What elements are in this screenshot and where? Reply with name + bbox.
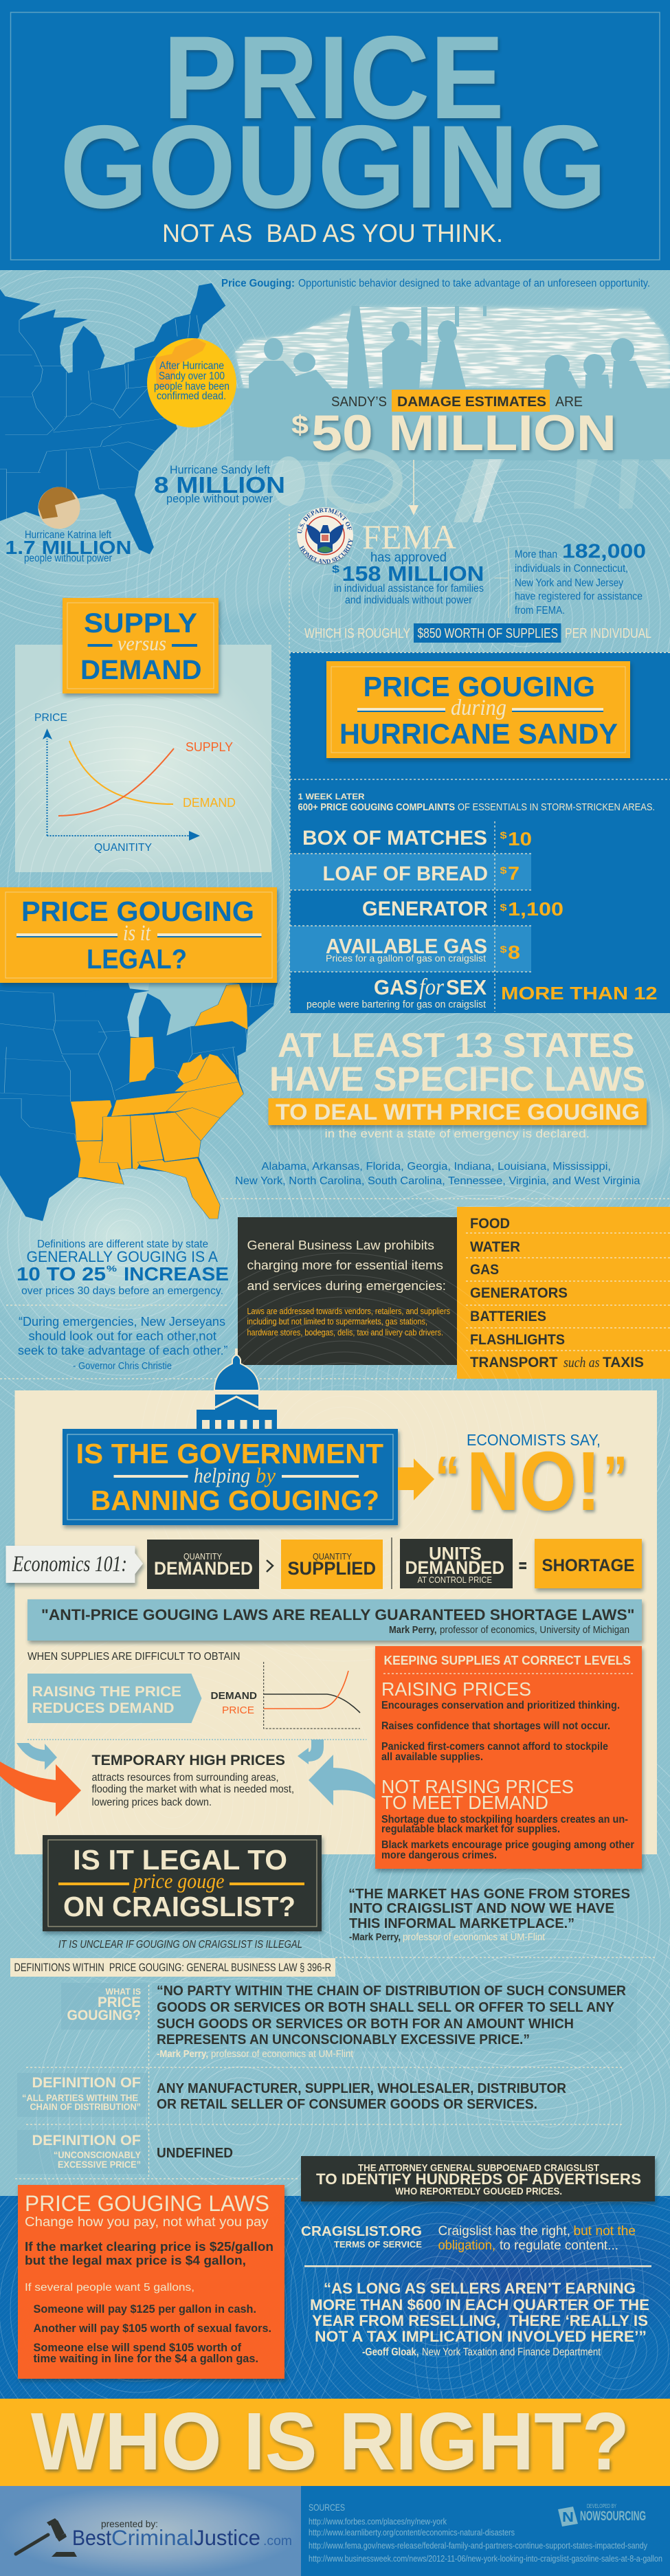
panel: essential items list: BATTERIES <box>470 1309 546 1324</box>
developer logo: N <box>562 2510 574 2525</box>
panel: price gouging laws: Someone else will spend $105 worth of <box>33 2342 241 2354</box>
presenter logo: .com <box>263 2534 292 2549</box>
row: unconscionably excessive price: EXCESSIVE PRICE” <box>58 2159 141 2170</box>
sources list: SOURCES <box>309 2502 345 2513</box>
table of gouged prices: LOAF OF BREAD <box>323 863 488 885</box>
equation: demanded over supplied equals shortage: QUANTITY <box>183 1552 223 1562</box>
Craigslist terms of service: to regulate content... <box>500 2239 618 2253</box>
banner: attorney general subpoena: TO IDENTIFY HUNDREDS OF ADVERTISERS <box>316 2170 641 2188</box>
equation: demanded over supplied equals shortage <box>147 1537 642 1589</box>
panel: price gouging during Hurricane Sandy <box>290 652 670 1013</box>
note: unclear if illegal: IT IS UNCLEAR IF GOUGING ON CRAIGSLIST IS ILLEGAL <box>58 1939 302 1951</box>
quote: market gone to Craigslist: “THE MARKET HAS GONE FROM STORES <box>348 1887 630 1902</box>
quote band: guaranteed shortage laws: professor of economics, University of Michigan <box>440 1624 629 1636</box>
text: temporary high prices <box>92 1753 294 1808</box>
stat: 182,000 individuals registered <box>515 540 646 617</box>
banner: is price gouging legal: LEGAL? <box>87 944 187 975</box>
table of gouged prices: 8 <box>508 942 520 963</box>
tag: raising the price reduces demand: REDUCES DEMAND <box>32 1700 174 1716</box>
banner: is price gouging legal: PRICE GOUGING <box>21 896 254 927</box>
heading banner: HURRICANE SANDY <box>339 718 618 750</box>
chart: demand and price: PRICE <box>222 1705 254 1716</box>
stat: 10 to 25 percent increase <box>16 1239 229 1297</box>
text: temporary high prices: attracts resources from surrounding areas, <box>92 1772 279 1784</box>
panel: keeping supplies at correct levels: more dangerous crimes. <box>381 1850 497 1861</box>
row: what is price gouging: REPRESENTS AN UNCONSCIONABLY EXCESSIVE PRICE.” <box>157 2032 530 2047</box>
stat: 182,000 individuals registered: New York and New Jersey <box>515 577 623 589</box>
row: what is price gouging: professor of economics at UM-Flint <box>211 2049 353 2060</box>
equation: demanded over supplied equals shortage: DEMANDED <box>154 1558 253 1579</box>
banner: is it legal on craigslist: price gouge <box>132 1869 225 1893</box>
table of gouged prices: SEX <box>446 975 487 999</box>
banner: is it legal on craigslist: IS IT LEGAL TO <box>73 1844 287 1876</box>
row: what is price gouging: PRICE <box>98 1995 141 2010</box>
quote band: guaranteed shortage laws: Mark Perry, <box>389 1624 437 1636</box>
panel: keeping supplies at correct levels: Raises confidence that shortages will not occur. <box>381 1720 610 1732</box>
arrow: blue small from top right <box>298 1740 324 1764</box>
panel: keeping supplies at correct levels: regulatable black market for supplies. <box>381 1823 560 1835</box>
panel: keeping supplies at correct levels: KEEPING SUPPLIES AT CORRECT LEVELS <box>383 1653 631 1667</box>
complaints note: 1 WEEK LATER <box>298 792 365 801</box>
panel: keeping supplies at correct levels: Encourages conservation and prioritized thinking. <box>381 1700 620 1711</box>
FEMA approvals: has approved <box>370 551 447 565</box>
quote: Geoff Gloak: YEAR FROM RESELLING, THERE ‘REALLY IS <box>312 2312 648 2329</box>
circle: Katrina area <box>38 487 80 529</box>
panel: essential items list: GENERATORS <box>470 1285 568 1301</box>
panel: General Business Law: including but not limited to supermarkets, gas stations, <box>247 1316 427 1326</box>
tag: raising the price reduces demand: RAISING THE PRICE <box>32 1684 181 1700</box>
per individual supplies strip: $850 WORTH OF SUPPLIES <box>418 626 558 641</box>
heading: at least 13 states: TO DEAL WITH PRICE GOUGING <box>276 1100 640 1124</box>
stat: 182,000 individuals registered: from FEMA. <box>515 605 565 617</box>
footer <box>0 2486 670 2576</box>
row: unconscionably excessive price: DEFINITION OF <box>32 2133 141 2148</box>
icon: Homeland Security seal: U.S. DEPARTMENT OF <box>298 507 352 533</box>
text: temporary high prices: flooding the market with what is needed most, <box>92 1784 294 1795</box>
quote: Governor Chris Christie <box>18 1315 228 1372</box>
quote: market gone to Craigslist: INTO CRAIGSLIST AND NOW WE HAVE <box>349 1901 614 1916</box>
quote: Governor Chris Christie: - Governor Chris Christie <box>73 1360 172 1372</box>
stat: 10 to 25 percent increase: Definitions are different state by state <box>37 1239 208 1250</box>
developer logo <box>558 2503 646 2527</box>
banner: attorney general subpoena: WHO REPORTEDLY GOUGED PRICES. <box>395 2186 562 2197</box>
panel: essential items list: GAS <box>470 1262 499 1278</box>
row: what is price gouging: -Mark Perry, <box>157 2049 208 2060</box>
panel: title header <box>0 0 670 270</box>
complaints note: 600+ PRICE GOUGING COMPLAINTS <box>298 802 455 813</box>
stat: 182,000 individuals registered: More than <box>515 548 557 561</box>
sources list: http://www.learnliberty.org/content/economics-natural-disasters <box>309 2527 515 2538</box>
title <box>60 12 607 233</box>
chart: supply versus demand <box>0 645 328 1091</box>
row: what is price gouging: GOODS OR SERVICES OR BOTH SHALL SELL OR OFFER TO SELL ANY <box>157 2000 615 2015</box>
circle: Sandy deaths: confirmed dead. <box>157 390 226 402</box>
stat: Katrina 1.7 million <box>5 529 132 564</box>
table of gouged prices: $ <box>500 902 507 913</box>
panel: keeping supplies at correct levels: Black markets encourage price gouging among other <box>381 1839 634 1851</box>
table of gouged prices: MORE THAN 12 <box>501 983 657 1003</box>
tag: raising the price reduces demand <box>27 1674 202 1723</box>
damage estimates headline: ARE <box>555 395 583 410</box>
row: what is price gouging: WHAT IS <box>106 1986 141 1997</box>
stat: Sandy 8 million: Hurricane Sandy left <box>170 463 270 476</box>
arrow: blue from orange panel <box>309 1755 375 1806</box>
stat: 10 to 25 percent increase: over prices 30 days before an emergency. <box>21 1285 223 1297</box>
arrow: orange into temporary prices <box>0 1762 81 1817</box>
FEMA approvals: and individuals without power <box>345 595 473 606</box>
table of gouged prices <box>290 821 657 1012</box>
quote: Geoff Gloak: “AS LONG AS SELLERS AREN’T EARNING <box>324 2280 636 2297</box>
panel: essential items list: WATER <box>470 1239 520 1255</box>
panel: price gouging laws: If several people want 5 gallons, <box>25 2282 194 2294</box>
chart: demand and price <box>210 1662 360 1729</box>
damage estimates headline: DAMAGE ESTIMATES <box>397 395 546 410</box>
stat: Sandy 8 million: people without power <box>166 492 273 505</box>
row: unconscionably excessive price <box>32 2133 233 2170</box>
table of gouged prices: 1,100 <box>508 898 563 920</box>
FEMA approvals: FEMA <box>362 518 456 556</box>
quote: market gone to Craigslist: -Mark Perry, <box>349 1932 401 1943</box>
complaints note <box>298 792 655 813</box>
stat: Sandy 8 million <box>154 463 285 505</box>
quantity label: QUANITITY <box>94 842 152 854</box>
quote: Geoff Gloak: -Geoff Gloak, <box>362 2346 419 2358</box>
Craigslist terms of service: obligation, <box>438 2239 495 2253</box>
FEMA approvals <box>332 518 509 618</box>
equation: demanded over supplied equals shortage: QUANTITY <box>313 1552 353 1562</box>
stat: 182,000 individuals registered: 182,000 <box>562 540 646 562</box>
table of gouged prices: Prices for a gallon of gas on craigslist <box>326 953 486 964</box>
demand label: DEMAND <box>183 796 236 810</box>
row: all parties: “ALL PARTIES WITHIN THE <box>22 2092 138 2103</box>
circle: Sandy deaths: Sandy over 100 <box>159 370 225 382</box>
banner: is price gouging legal <box>0 887 277 983</box>
title: GOUGING <box>60 101 607 233</box>
damage estimates headline: SANDY’S <box>331 395 387 410</box>
panel: keeping supplies at correct levels: RAISING PRICES <box>381 1678 531 1700</box>
heading: at least 13 states: in the event a state of emergency is declared. <box>324 1128 590 1140</box>
icon: Homeland Security seal: HOMELAND SECURITY <box>300 538 353 564</box>
damage estimates headline <box>291 390 616 461</box>
Craigslist terms of service: Craigslist has the right, <box>438 2224 570 2239</box>
economists say no: NO! <box>467 1434 601 1528</box>
panel: General Business Law: Laws are addressed towards vendors, retailers, and suppliers <box>247 1306 450 1316</box>
circle: Sandy deaths: After Hurricane <box>159 360 224 372</box>
panel: price gouging laws: but the legal max price is $4 gallon, <box>25 2253 246 2267</box>
presenter logo: Best <box>72 2525 111 2550</box>
title: PRICE <box>163 12 504 144</box>
table of gouged prices: $ <box>500 865 507 876</box>
list of states: Alabama, Arkansas, Florida, Georgia, Indiana, Louisiana, Mississippi, <box>261 1161 611 1173</box>
quote band: guaranteed shortage laws: "ANTI-PRICE GOUGING LAWS ARE REALLY GUARANTEED SHORTAGE LAWS" <box>41 1606 635 1623</box>
heading banner: during <box>451 696 506 720</box>
quote: market gone to Craigslist <box>348 1887 630 1943</box>
table: definitions <box>15 1983 637 2179</box>
panel: keeping supplies at correct levels <box>375 1646 642 1869</box>
definition line: Price Gouging: <box>221 278 295 289</box>
price label: PRICE <box>34 712 67 724</box>
row: what is price gouging: SUCH GOODS OR SERVICES OR BOTH FOR AN AMOUNT WHICH <box>157 2017 574 2032</box>
panel: essential items list <box>457 1207 670 1379</box>
row: all parties: OR RETAIL SELLER OF CONSUMER GOODS OR SERVICES. <box>157 2097 537 2112</box>
quote band: guaranteed shortage laws <box>27 1599 642 1641</box>
equation: demanded over supplied equals shortage: AT CONTROL PRICE <box>418 1575 492 1585</box>
banner: supply versus demand: DEMAND <box>80 655 202 685</box>
panel: General Business Law: General Business Law prohibits <box>247 1239 434 1252</box>
panel: General Business Law: hardware stores, bodegas, delis, taxi and livery cab drivers. <box>247 1327 443 1337</box>
table of gouged prices: for <box>419 975 445 1000</box>
sources list: http://www.forbes.com/places/ny/new-york <box>309 2516 447 2527</box>
FEMA approvals: $ <box>332 564 340 575</box>
presenter logo: presented by: <box>101 2519 158 2529</box>
banner: attorney general subpoena <box>301 2156 655 2201</box>
quote: Governor Chris Christie: “During emergencies, New Jerseyans <box>19 1315 225 1329</box>
heading: at least 13 states: AT LEAST 13 STATES <box>278 1026 635 1065</box>
quote: Geoff Gloak: MORE THAN $600 IN EACH QUARTER OF THE <box>310 2296 649 2313</box>
panel: General Business Law <box>238 1217 457 1365</box>
table of gouged prices: 10 <box>508 828 532 850</box>
Craigslist terms of service: but not the <box>573 2224 636 2239</box>
per individual supplies strip: WHICH IS ROUGHLY <box>304 626 410 641</box>
heading banner: PRICE GOUGING <box>363 671 595 702</box>
table of gouged prices: GENERATOR <box>362 898 488 920</box>
banner: is price gouging legal: is it <box>123 921 151 946</box>
banner: attorney general subpoena: THE ATTORNEY GENERAL SUBPOENAED CRAIGSLIST <box>358 2163 599 2174</box>
panel: price gouging laws: PRICE GOUGING LAWS <box>25 2191 269 2216</box>
table of gouged prices: GAS <box>374 975 418 999</box>
sources list <box>309 2502 662 2564</box>
supply label: SUPPLY <box>186 740 233 754</box>
circle: Sandy deaths <box>147 338 236 428</box>
tag: Economics 101: Economics 101: <box>12 1552 127 1577</box>
row: all parties: CHAIN OF DISTRIBUTION” <box>30 2101 141 2112</box>
row: what is price gouging <box>67 1984 627 2060</box>
stat: 10 to 25 percent increase: 10 TO 25 <box>16 1263 106 1285</box>
equation: demanded over supplied equals shortage: DEMANDED <box>405 1557 504 1578</box>
stat: Sandy 8 million: 8 MILLION <box>154 472 285 498</box>
banner: is the government helping: IS THE GOVERNMENT <box>76 1438 383 1469</box>
panel: blue lower section <box>0 2196 670 2399</box>
stat: Katrina 1.7 million: 1.7 MILLION <box>5 537 132 558</box>
banner: is it legal on craigslist: ON CRAIGSLIST? <box>63 1891 295 1922</box>
developer logo: DEVELOPED BY <box>587 2503 616 2509</box>
row: unconscionably excessive price: “UNCONSCIONABLY <box>54 2149 142 2160</box>
list of states: New York, North Carolina, South Carolina, Tennessee, Virginia, and West Virginia <box>235 1175 640 1187</box>
banner: is the government helping <box>63 1429 398 1525</box>
photo: flood survivors silhouettes <box>234 306 670 522</box>
Craigslist terms of service: TERMS OF SERVICE <box>334 2239 422 2250</box>
panel: keeping supplies at correct levels: Panicked first-comers cannot afford to stockpile <box>381 1741 608 1753</box>
chart: demand and price: DEMAND <box>210 1690 257 1702</box>
table of gouged prices: BOX OF MATCHES <box>302 827 487 850</box>
row: what is price gouging: GOUGING? <box>67 2008 141 2023</box>
panel: keeping supplies at correct levels: all available supplies. <box>381 1751 483 1763</box>
banner: is it legal on craigslist <box>43 1835 322 1931</box>
panel: price gouging laws: Change how you pay, not what you pay <box>25 2215 269 2230</box>
text: temporary high prices: TEMPORARY HIGH PRICES <box>92 1753 285 1768</box>
subtitle: NOT AS BAD AS YOU THINK. <box>162 219 503 247</box>
presenter logo: Justice <box>194 2525 260 2550</box>
row: all parties: DEFINITION OF <box>32 2075 141 2091</box>
panel: essential items list: TAXIS <box>603 1355 644 1370</box>
panel: keeping supplies at correct levels: TO MEET DEMAND <box>381 1792 548 1813</box>
equation: demanded over supplied equals shortage: SHORTAGE <box>541 1556 635 1575</box>
equation: demanded over supplied equals shortage: SUPPLIED <box>287 1558 376 1579</box>
table of gouged prices: $ <box>500 944 507 955</box>
economists say no: ECONOMISTS SAY, <box>467 1431 601 1449</box>
quote: Geoff Gloak <box>310 2280 649 2358</box>
arrow: damage to FEMA <box>409 460 418 515</box>
panel: essential items list: FOOD <box>470 1216 510 1232</box>
panel: General Business Law: and services during emergencies: <box>247 1279 446 1293</box>
per individual supplies strip <box>304 623 651 643</box>
equation: demanded over supplied equals shortage: UNITS <box>429 1543 482 1564</box>
panel: keeping supplies at correct levels: Shortage due to stockpiling hoarders creates an un- <box>381 1814 628 1825</box>
heading: at least 13 states: HAVE SPECIFIC LAWS <box>269 1060 645 1098</box>
tag: Economics 101 <box>5 1546 143 1583</box>
banner: supply versus demand: SUPPLY <box>84 608 197 639</box>
heading: at least 13 states <box>268 1026 647 1140</box>
quote: market gone to Craigslist: professor of economics at UM-Flint <box>403 1932 545 1943</box>
stat: 10 to 25 percent increase: % <box>107 1264 117 1274</box>
banner: supply versus demand: versus <box>118 632 166 655</box>
stat: 10 to 25 percent increase: INCREASE <box>124 1263 229 1285</box>
definition line: Opportunistic behavior designed to take advantage of an unforeseen opportunity. <box>298 278 650 289</box>
heading: definitions strip <box>10 1958 335 1977</box>
table of gouged prices: $ <box>500 830 507 841</box>
panel: keeping supplies at correct levels: NOT RAISING PRICES <box>381 1776 574 1797</box>
banner: who is right: WHO IS RIGHT? <box>31 2396 629 2487</box>
text: when supplies are difficult: WHEN SUPPLIES ARE DIFFICULT TO OBTAIN <box>27 1651 241 1663</box>
row: all parties: ANY MANUFACTURER, SUPPLIER, WHOLESALER, DISTRIBUTOR <box>157 2081 567 2096</box>
panel: essential items list: FLASHLIGHTS <box>470 1332 565 1348</box>
quote: Geoff Gloak: New York Taxation and Finance Department <box>422 2346 601 2358</box>
panel: price gouging laws: Another will pay $105 worth of sexual favors. <box>33 2322 271 2335</box>
panel: price gouging laws: time waiting in line for the $4 a gallon gas. <box>33 2353 258 2365</box>
stat: 50 million dollars: $ <box>291 411 309 440</box>
Craigslist terms of service: CRAGISLIST.ORG <box>301 2224 422 2239</box>
table of gouged prices: 7 <box>508 863 520 884</box>
table of gouged prices: AVAILABLE GAS <box>326 934 487 958</box>
stat: Katrina 1.7 million: Hurricane Katrina left <box>25 529 112 541</box>
icon: Homeland Security seal <box>297 507 353 565</box>
panel: price gouging laws: If the market clearing price is $25/gallon <box>25 2239 273 2254</box>
table of gouged prices: people were bartering for gas on craigslist <box>306 999 487 1010</box>
quote: Geoff Gloak: NOT A TAX IMPLICATION INVOLVED HERE’” <box>315 2328 647 2345</box>
presenter logo: Criminal <box>111 2525 194 2550</box>
panel: price gouging laws: Someone will pay $125 per gallon in cash. <box>33 2303 256 2316</box>
Craigslist terms of service <box>301 2224 651 2267</box>
stat: 182,000 individuals registered: individuals in Connecticut, <box>515 563 628 575</box>
presenter logo <box>0 2486 301 2576</box>
economists say no: ” <box>603 1445 627 1511</box>
map: eastern United States with hurricane areas <box>0 283 236 554</box>
icon: capitol building <box>197 1349 277 1430</box>
banner: is the government helping: BANNING GOUGING? <box>91 1485 379 1516</box>
map: states with price gouging laws <box>0 983 278 1221</box>
panel: price gouging laws <box>18 2185 284 2379</box>
FEMA approvals: in individual assistance for families <box>334 583 484 595</box>
economists say no: “ <box>435 1445 460 1511</box>
panel: General Business Law: charging more for essential items <box>247 1258 443 1272</box>
arrow: blue from left <box>16 1743 57 1770</box>
banner: supply versus demand <box>63 598 219 693</box>
heading: definitions strip: DEFINITIONS WITHIN PRICE GOUGING: GENERAL BUSINESS LAW § 396-R <box>14 1961 331 1974</box>
quote: Governor Chris Christie: seek to take advantage of each other.” <box>18 1344 228 1357</box>
stat: 10 to 25 percent increase: GENERALLY GOUGING IS A <box>26 1248 218 1265</box>
panel: government section <box>0 1253 657 2005</box>
heading banner <box>326 661 630 758</box>
row: all parties <box>22 2075 567 2112</box>
quote: market gone to Craigslist: THIS INFORMAL MARKETPLACE.” <box>349 1916 574 1931</box>
FEMA approvals: 158 MILLION <box>342 562 484 586</box>
icon: gavel <box>16 2518 77 2557</box>
banner: is the government helping: by <box>256 1463 276 1487</box>
banner: is the government helping: helping <box>194 1463 250 1487</box>
stat: Katrina 1.7 million: people without power <box>24 553 112 564</box>
stat: 50 million dollars: 50 MILLION <box>311 406 616 461</box>
panel: essential items list: such as <box>563 1354 599 1370</box>
stat: 182,000 individuals registered: have registered for assistance <box>515 591 643 602</box>
row: unconscionably excessive price: UNDEFINED <box>157 2146 233 2161</box>
text: temporary high prices: lowering prices back down. <box>92 1797 212 1808</box>
row: what is price gouging: “NO PARTY WITHIN THE CHAIN OF DISTRIBUTION OF SUCH CONSUMER <box>157 1984 627 1999</box>
list of states <box>235 1161 640 1187</box>
circle: Sandy deaths: people have been <box>154 381 230 392</box>
quote: Governor Chris Christie: should look out for each other,not <box>29 1329 216 1343</box>
panel: essential items list: TRANSPORT <box>470 1355 558 1370</box>
arrow: to economists answer <box>398 1458 434 1500</box>
